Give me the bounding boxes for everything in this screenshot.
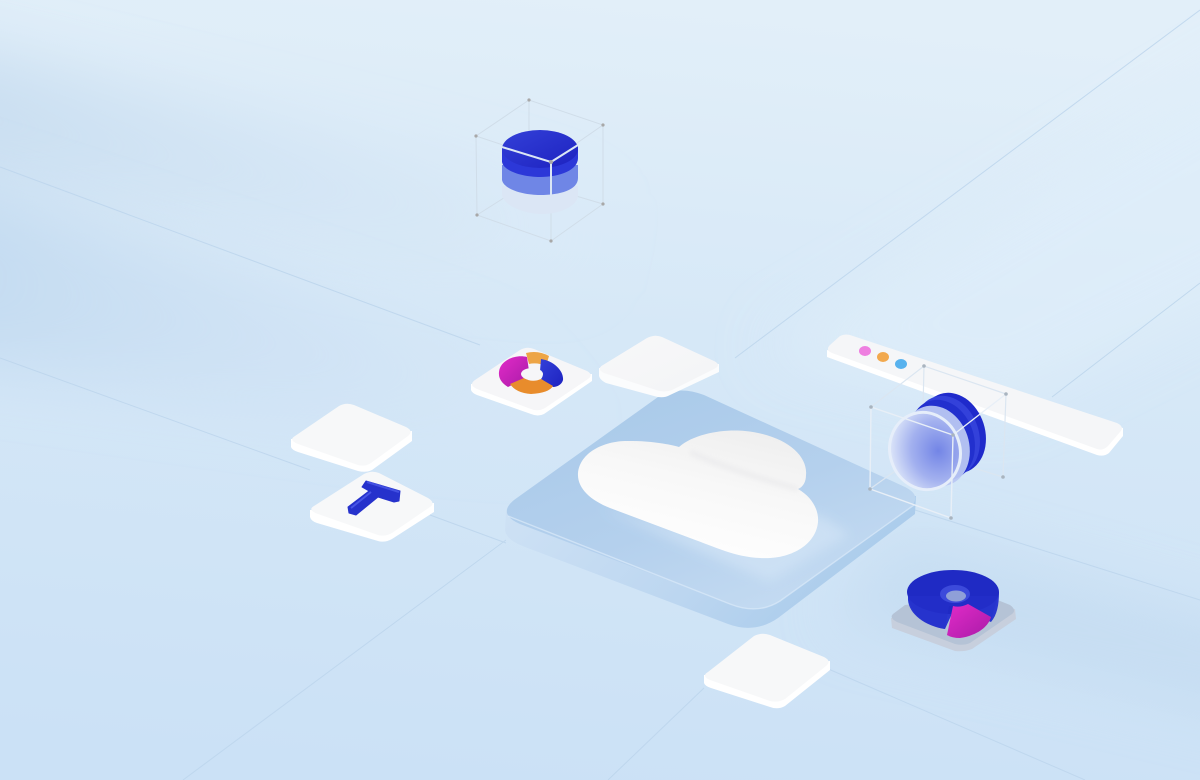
icon: letter T <box>348 481 400 515</box>
icon: floating stacked pie in wireframe cube <box>474 98 605 243</box>
panel: blank tile bottom <box>704 634 830 708</box>
panel: blank tile left <box>291 404 412 472</box>
panel: glass tile with ring pie chart <box>891 570 1016 651</box>
panel: T icon tile <box>310 472 434 542</box>
back cube edges <box>870 366 1006 489</box>
icon: pink dot <box>859 346 871 356</box>
panel: blank tile top centre <box>599 336 719 397</box>
top pie layer <box>502 145 578 177</box>
platform edge <box>505 496 916 628</box>
back cube edges <box>476 100 603 241</box>
faded bottom layer <box>502 186 578 214</box>
platform top surface <box>507 390 915 609</box>
icon: blue dot <box>895 359 907 369</box>
icon: white cloud <box>578 431 818 558</box>
panel: glass cloud platform <box>505 390 916 628</box>
icon: orange dot <box>877 352 889 362</box>
panel: donut chart tile <box>471 348 592 416</box>
ring pie chart <box>907 570 999 638</box>
front cube edges <box>870 394 1006 518</box>
middle layer <box>502 165 578 195</box>
donut chart segments <box>499 352 563 394</box>
icon: glass lens stack in wireframe cube <box>868 364 1008 520</box>
panel: window bar with three dots <box>827 334 1123 456</box>
